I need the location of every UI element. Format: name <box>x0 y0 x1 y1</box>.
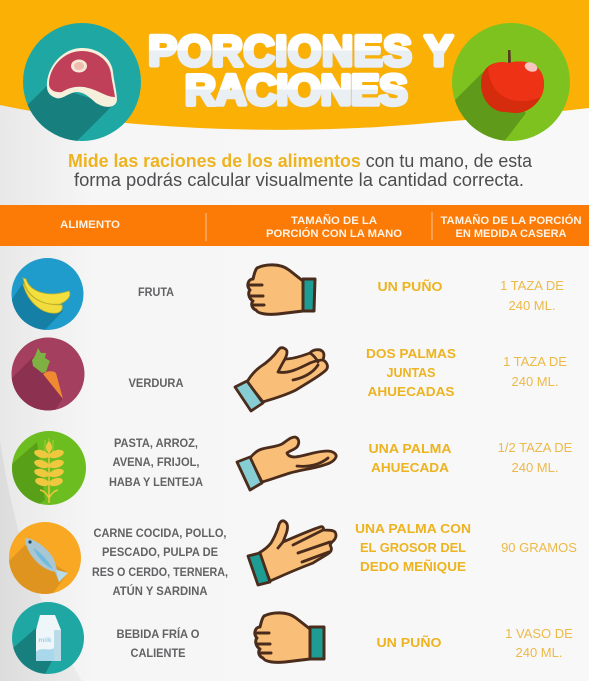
portion label <box>355 521 471 574</box>
label: RES O CERDO, TERNERA, <box>92 565 228 579</box>
icon: wheat <box>12 431 86 505</box>
table header bar: EN MEDIDA CASERA <box>456 228 567 240</box>
label: FRUTA <box>138 285 174 299</box>
label <box>92 526 228 598</box>
household measure: 240 ML. <box>509 298 555 313</box>
portion label: DOS PALMAS <box>366 346 456 361</box>
icon: cupped palm <box>237 437 336 490</box>
label: PASTA, ARROZ, <box>114 436 198 450</box>
intro text <box>68 151 533 190</box>
portion label: UNA PALMA <box>368 441 452 456</box>
row 3: pasta y cereales <box>5 431 573 510</box>
title: RACIONES <box>185 66 407 114</box>
icon: milk carton <box>12 602 84 674</box>
label <box>109 436 203 489</box>
household measure: 240 ML. <box>516 645 562 660</box>
icon: milk carton: milk <box>38 637 52 644</box>
icon: fist <box>248 265 315 314</box>
household measure <box>500 278 564 313</box>
household measure <box>505 626 573 660</box>
portion label: AHUECADA <box>371 460 450 475</box>
row 2: verdura <box>5 338 567 415</box>
portion label: DEDO MEÑIQUE <box>360 559 466 574</box>
label: PESCADO, PULPA DE <box>102 545 218 559</box>
icon: open hand <box>248 521 336 585</box>
icon: carrot <box>12 338 84 410</box>
household measure: 240 ML. <box>512 460 558 475</box>
portion label: UN PUÑO <box>376 635 442 650</box>
household measure <box>503 354 567 389</box>
label: AVENA, FRIJOL, <box>112 455 200 469</box>
row 1: fruta <box>0 258 564 335</box>
table header bar: PORCIÓN CON LA MANO <box>266 227 402 240</box>
household measure: 1 TAZA DE <box>503 354 567 369</box>
portion label <box>366 346 456 399</box>
household measure: 1/2 TAZA DE <box>498 440 573 455</box>
label: VERDURA <box>128 376 184 390</box>
table header bar: TAMAÑO DE LA <box>291 214 377 227</box>
portion label: UN PUÑO <box>378 279 442 294</box>
portion label: JUNTAS <box>386 365 436 380</box>
label: BEBIDA FRÍA O <box>116 626 200 641</box>
table header bar: TAMAÑO DE LA PORCIÓN <box>440 214 582 227</box>
icon: apple <box>450 23 570 143</box>
label: ATÚN Y SARDINA <box>112 583 208 598</box>
icon: banana <box>12 258 84 330</box>
icon: fist <box>255 613 324 662</box>
title <box>148 28 454 114</box>
household measure: 90 GRAMOS <box>501 540 577 555</box>
row 5: bebida <box>5 602 573 680</box>
header banner <box>0 0 589 130</box>
intro text: Mide las raciones de los alimentos con tu mano, de esta <box>68 151 533 171</box>
table header bar: ALIMENTO <box>60 219 120 231</box>
icon: meat <box>20 23 141 143</box>
table header bar <box>0 205 589 246</box>
household measure: 1 VASO DE <box>505 626 573 641</box>
icon: cupped hands <box>235 348 327 411</box>
row 4: carnes <box>5 521 577 598</box>
label: HABA Y LENTEJA <box>109 475 203 489</box>
label: CARNE COCIDA, POLLO, <box>94 526 226 540</box>
household measure: 240 ML. <box>512 374 558 389</box>
title: PORCIONES Y <box>148 28 454 76</box>
portion label: AHUECADAS <box>368 384 455 399</box>
household measure: 1 TAZA DE <box>500 278 564 293</box>
portion label: EL GROSOR DEL <box>360 540 466 555</box>
household measure <box>498 440 573 475</box>
icon: fish <box>5 522 81 597</box>
portion label: UNA PALMA CON <box>355 521 471 536</box>
label <box>116 626 200 660</box>
portion label <box>368 441 452 475</box>
intro text: forma podrás calcular visualmente la cantidad correcta. <box>74 170 524 190</box>
label: CALIENTE <box>130 646 186 660</box>
